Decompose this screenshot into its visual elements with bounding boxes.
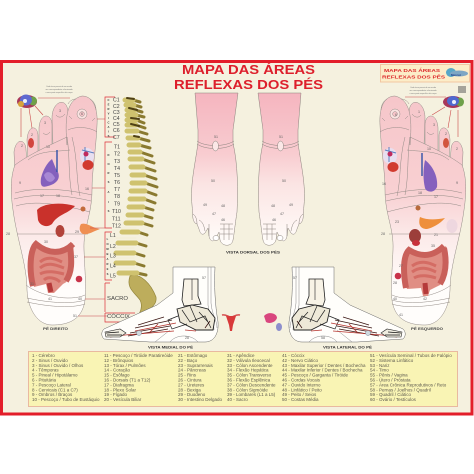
spine labels: T7 [114, 187, 120, 193]
legend column 1: 3 - Sinus / Ouvido / Olhos [32, 363, 84, 368]
labels on left foot: 6 [81, 112, 83, 116]
icon: prostate [264, 313, 282, 331]
legend column 3: 23 - Suprarrenais [178, 363, 214, 368]
legend column 6: 51 - Vesícula Seminal / Tubos de Falópio [370, 353, 452, 358]
labels on left foot: 18 [56, 194, 60, 198]
spine labels: C1 [113, 98, 120, 104]
vertical region labels: V [108, 112, 110, 116]
legend column 4: 35 - Cólon Transverso [227, 373, 272, 378]
dorsal view: right foot [258, 93, 304, 245]
legend column 4: 40 - Sacro [227, 397, 248, 402]
legend column 4: 36 - Flexão Esplênica [227, 378, 271, 382]
legend column 2: 11 - Pescoço / Tiróide Paratireóide [104, 353, 173, 358]
labels on left foot: 17 [40, 194, 44, 198]
note above left foot: seu correspondente relacionado [45, 88, 73, 91]
icon: spleen [416, 206, 420, 210]
legend column 2: 18 - Plexo Solar [104, 387, 137, 392]
legend column 4: 32 - Válvula Ileocecal [227, 358, 270, 363]
labels on left foot: 16 [85, 187, 89, 191]
labels on right foot: 9 [456, 181, 458, 185]
labels on left foot: 10 [46, 145, 50, 149]
icon: lung and spleen [422, 153, 437, 192]
vertical region labels: A [108, 125, 110, 129]
spine labels: T6 [114, 180, 120, 186]
spine labels: CÓCCIX [107, 313, 131, 320]
logo box: MAPA DAS ÁREAS [384, 67, 441, 74]
legend column 3: 24 - Pâncreas [178, 368, 207, 373]
vertical region labels: S [108, 134, 110, 138]
legend column 2: 14 - Coração [104, 368, 131, 373]
legend column 5: 50 - Costas Média [282, 397, 319, 402]
legend column 6: 59 - Quadril / Ciático [370, 392, 412, 397]
icon: kidney [56, 225, 64, 237]
vertical region labels: R [108, 107, 110, 111]
caption: vista medial: VISTA MEDIAL DO PÉ [148, 344, 194, 350]
barcode [459, 86, 465, 93]
medial foot view: 57 [202, 276, 206, 280]
caption: pé direito: PÉ DIREITO [43, 326, 68, 331]
logo box [380, 64, 470, 82]
legend column 1: 9 - Ombros / Braços [32, 392, 73, 397]
legend column 6: 60 - Ovário / Testículos [370, 397, 417, 402]
left sole: pé direito [6, 94, 100, 331]
caption: vista dorsal: VISTA DORSAL DOS PÉS [226, 250, 281, 254]
labels on right foot [381, 110, 458, 317]
labels on right foot: 35 [431, 244, 435, 248]
spine labels: L4 [110, 264, 116, 270]
legend column 5: 46 - Cordas Vocais [282, 378, 321, 382]
legend column 3: 30 - Intestino Delgado [178, 397, 223, 402]
caption: vista lateral: VISTA LATERAL DO PÉ [323, 344, 373, 350]
icon: brain [443, 96, 464, 108]
title [174, 62, 323, 92]
legend column 3: 27 - Ureteres [178, 382, 205, 387]
legend column 4: 37 - Cólon Descendente [227, 382, 276, 387]
note above left foot: a uma parte específica do corpo [45, 91, 73, 94]
labels on right foot: 2 [445, 132, 447, 136]
labels on left foot: 9 [19, 181, 21, 185]
labels on left foot: 28 [6, 232, 10, 236]
legend column 1: 1 - Cérebro [32, 353, 55, 358]
labels on right foot: 17 [434, 195, 438, 199]
vertical region labels: L [107, 237, 109, 241]
vertical region labels: I [108, 116, 109, 120]
dorsal view: left foot [192, 93, 238, 245]
labels on left foot: 37 [74, 255, 78, 259]
labels on left foot: 2 [21, 144, 23, 148]
spine labels: L2 [110, 244, 116, 250]
legend column 2: 20 - Vesícula Biliar [104, 397, 142, 402]
arrows from toes to brain [21, 98, 70, 137]
lateral foot view: 58 [321, 336, 325, 340]
dorsal view: left foot: 50 [211, 179, 215, 183]
note above left foot [45, 85, 73, 94]
vertical region labels: I [108, 200, 109, 204]
icon: adrenal and pancreas mark [80, 224, 100, 234]
vertical region labels: S [108, 209, 110, 213]
spine labels: T4 [114, 166, 120, 172]
legend column 4 [227, 353, 276, 402]
labels on right foot: 21 [434, 233, 438, 237]
dorsal view: right foot: 47 [280, 212, 284, 216]
dorsal view: right foot: 50 [282, 179, 286, 183]
legend column 2: 15 - Esôfago [104, 373, 130, 378]
labels on right foot: 42 [423, 297, 427, 301]
spine labels: T8 [114, 194, 120, 200]
spine illustration [114, 98, 157, 319]
vertical region labels: D [108, 153, 110, 157]
vertical region labels: C [108, 98, 110, 102]
legend column 5: 41 - Cóccix [282, 353, 305, 358]
spine labels [107, 98, 131, 320]
spine labels: C7 [113, 135, 120, 141]
vertical region labels: M [106, 247, 109, 251]
labels on right foot: 27 [399, 264, 403, 268]
dorsal view: right foot: 51 [279, 135, 283, 139]
dorsal view: left foot: 49 [203, 203, 207, 207]
icon: kidney [409, 229, 421, 243]
icon: pituitary in toe [443, 138, 449, 148]
legend column 3: 26 - Cintura [178, 378, 202, 382]
dorsal view: right foot: 46 [272, 218, 276, 222]
title: REFLEXAS DOS PÉS [174, 77, 323, 92]
legend column 1: 8 - Cervicais (C1 a C7) [32, 387, 78, 392]
dorsal view: left foot: 47 [212, 212, 216, 216]
vertical region labels: E [107, 267, 109, 271]
labels on right foot: 28 [381, 232, 385, 236]
legend column 4: 31 - Apêndice [227, 353, 255, 358]
legend column 2: 13 - Tórax / Pulmões [104, 363, 146, 368]
legend column 5: 44 - Maxilar Inferior / Dentes / Bochecha [282, 368, 363, 373]
labels on right foot: 40 [393, 297, 397, 301]
legend column 3: 28 - Bexiga [178, 387, 201, 392]
dorsal view: left foot: 46 [221, 218, 225, 222]
spine labels: C5 [113, 122, 120, 128]
labels on left foot [6, 109, 89, 318]
spine labels: L5 [110, 274, 116, 280]
legend column 4: 34 - Flexão Hepática [227, 368, 269, 373]
legend column 3: 22 - Baço [178, 358, 198, 363]
legend column 2 [104, 353, 173, 402]
title: MAPA DAS ÁREAS [182, 62, 315, 77]
labels on right foot: 41 [399, 313, 403, 317]
vertical region labels: S [108, 180, 110, 184]
legend column 6: 55 - Pênis / Vagina [370, 373, 408, 378]
medial foot view [102, 267, 218, 342]
spine labels: T3 [114, 159, 120, 165]
note above right foot: Cada área possui de um modo [410, 86, 436, 89]
vertical region labels: S [107, 272, 109, 276]
labels on right foot: 18 [418, 191, 422, 195]
labels on left foot: 51 [73, 314, 77, 318]
vertical region labels: E [108, 102, 110, 106]
spine labels: T1 [114, 144, 120, 150]
legend column 4: 39 - Lombares (L1 a L5) [227, 392, 276, 397]
legend column 5: 48 - Linfático / Peito [282, 387, 322, 392]
vertebral bodies [116, 100, 145, 273]
vertical region labels [106, 98, 110, 276]
spine labels: T2 [114, 152, 120, 158]
labels on left foot: 3 [44, 121, 46, 125]
spine labels: C6 [113, 128, 120, 134]
legend column 5: 47 - Ouvido Interno [282, 382, 321, 387]
sacrum and coccyx [129, 275, 156, 319]
vertical region labels: I [108, 130, 109, 134]
legend column 6: 56 - Útero / Próstata [370, 376, 411, 382]
note above right foot: a uma parte específica do corpo [409, 92, 437, 95]
icon: brain [17, 94, 37, 108]
icon: intestines [403, 246, 447, 296]
legend column 6: 54 - Timo [370, 368, 389, 373]
icon: bladder [76, 276, 82, 282]
legend column 5: 43 - Maxilar Superior / Dentes / Bochecha [282, 363, 366, 368]
legend column 4: 38 - Cólon Sigmóide [227, 387, 268, 392]
legend column 3: 21 - Estômago [178, 353, 208, 358]
spine labels: L1 [110, 233, 116, 239]
pointer lines from foot to spine [78, 119, 107, 316]
labels on left foot: 31 [30, 282, 34, 286]
spinous processes [133, 100, 157, 275]
labels on right foot: 23 [395, 220, 399, 224]
labels on left foot: 30 [44, 240, 48, 244]
arrows from toes to brain [405, 97, 458, 137]
icon: lung [41, 150, 59, 187]
legend column 6: 58 - Pernas / Joelhos / Quadril [370, 387, 431, 392]
lateral foot view: 57 [293, 276, 297, 280]
legend column 6: 52 - Sistema Linfático [370, 358, 414, 363]
icon: bladder [395, 273, 401, 279]
legend column 1: 10 - Pescoço / Tubo de Eustáquio [32, 397, 100, 402]
legend panel [28, 352, 458, 406]
note above right foot [409, 86, 437, 95]
legend column 3: 29 - Duodeno [178, 392, 206, 397]
poster background with red frame [2, 62, 472, 414]
legend column 1: 4 - Têmporas [32, 368, 59, 373]
spine labels: T12 [112, 224, 121, 230]
spine labels: T9 [114, 202, 120, 208]
legend column 2: 16 - Dorsais (T1 a T12) [104, 378, 151, 382]
icon: intestines [30, 243, 74, 293]
icon: heart [80, 147, 94, 170]
spine labels: SACRO [107, 296, 128, 302]
legend column 2: 19 - Fígado [104, 392, 128, 397]
spine labels: T10 [112, 209, 121, 215]
note above right foot: seu correspondente relacionado [409, 89, 437, 92]
dorsal view: left foot: 48 [221, 204, 225, 208]
spine brackets [105, 97, 135, 322]
labels on left foot: 41 [48, 297, 52, 301]
vertical region labels: A [108, 190, 110, 194]
dorsal view: right foot: 49 [289, 203, 293, 207]
labels on left foot: 29 [75, 230, 79, 234]
cervical shading [127, 98, 139, 137]
spine labels: C4 [113, 116, 120, 122]
legend column 5 [282, 353, 366, 402]
dorsal view: left foot: 51 [214, 135, 218, 139]
medial foot view: 28 [185, 336, 189, 340]
legend column 2: 12 - Brônquios [104, 358, 134, 363]
legend column 2: 17 - Diafragma [104, 382, 134, 387]
note above left foot: Cada área possui de um modo [46, 85, 72, 88]
lateral foot view [289, 267, 405, 342]
labels on right foot: 10 [427, 147, 431, 151]
spine labels: L3 [110, 254, 116, 260]
icon: liver [37, 204, 75, 226]
vertical region labels: O [106, 242, 109, 246]
legend column 3: 25 - Rins [178, 373, 197, 378]
labels on right foot: 28 [393, 281, 397, 285]
labels on left foot: 3 [59, 109, 61, 113]
legend column 1 [32, 353, 100, 402]
right sole: pé esquerdo [380, 96, 466, 331]
legend column 6 [370, 353, 452, 402]
spine labels: T11 [112, 216, 121, 222]
labels on right foot: 2 [456, 147, 458, 151]
labels on left foot: 2 [31, 133, 33, 137]
legend column 5: 49 - Peito / Seios [282, 392, 317, 397]
logo box: Mercur [451, 73, 462, 77]
labels on right foot: 1 [418, 110, 420, 114]
vertical region labels: R [108, 171, 110, 175]
caption: pé esquerdo: PÉ ESQUERDO [411, 326, 443, 331]
legend column 6: 53 - Nariz [370, 363, 390, 368]
dorsal view: right foot: 48 [271, 204, 275, 208]
vertical region labels: R [107, 262, 109, 266]
labels on left foot: 40 [78, 297, 82, 301]
legend column 1: 7 - Pescoço Lateral [32, 382, 71, 387]
legend column 5: 42 - Nervo Ciático [282, 358, 319, 363]
spine labels: C3 [113, 110, 120, 116]
vertical region labels: A [107, 257, 109, 261]
legend column 4: 33 - Cólon Ascendente [227, 363, 273, 368]
legend column 1: 2 - Sinus / Ouvido [32, 358, 68, 363]
icon: stomach [446, 219, 458, 233]
vertical region labels: C [108, 120, 110, 124]
icon: pituitary in toe [28, 138, 34, 148]
icon: heart [383, 147, 398, 172]
legend column 6: 57 - Área Crônica Reprodutivos / Reto [370, 381, 447, 387]
icon: uterus [222, 315, 240, 331]
spine labels: C2 [113, 104, 120, 110]
discs [114, 142, 145, 268]
vertical region labels: O [107, 162, 110, 166]
logo box: REFLEXAS DOS PÉS [382, 72, 446, 80]
icon: pancreas [419, 217, 445, 229]
labels on right foot: 6 [395, 113, 397, 117]
icon: gallbladder and stomach marker [80, 206, 86, 212]
legend column 5: 45 - Pescoço / Garganta / Tiróide [282, 373, 349, 378]
legend column 3 [178, 353, 223, 402]
legend column 1: 5 - Pineal / Hipotálamo [32, 373, 78, 378]
labels on right foot: 16 [382, 182, 386, 186]
legend column 1: 6 - Pituitária [32, 378, 57, 382]
labels on right foot: 3 [433, 123, 435, 127]
spine labels: T5 [114, 173, 120, 179]
vertical region labels: B [107, 252, 109, 256]
